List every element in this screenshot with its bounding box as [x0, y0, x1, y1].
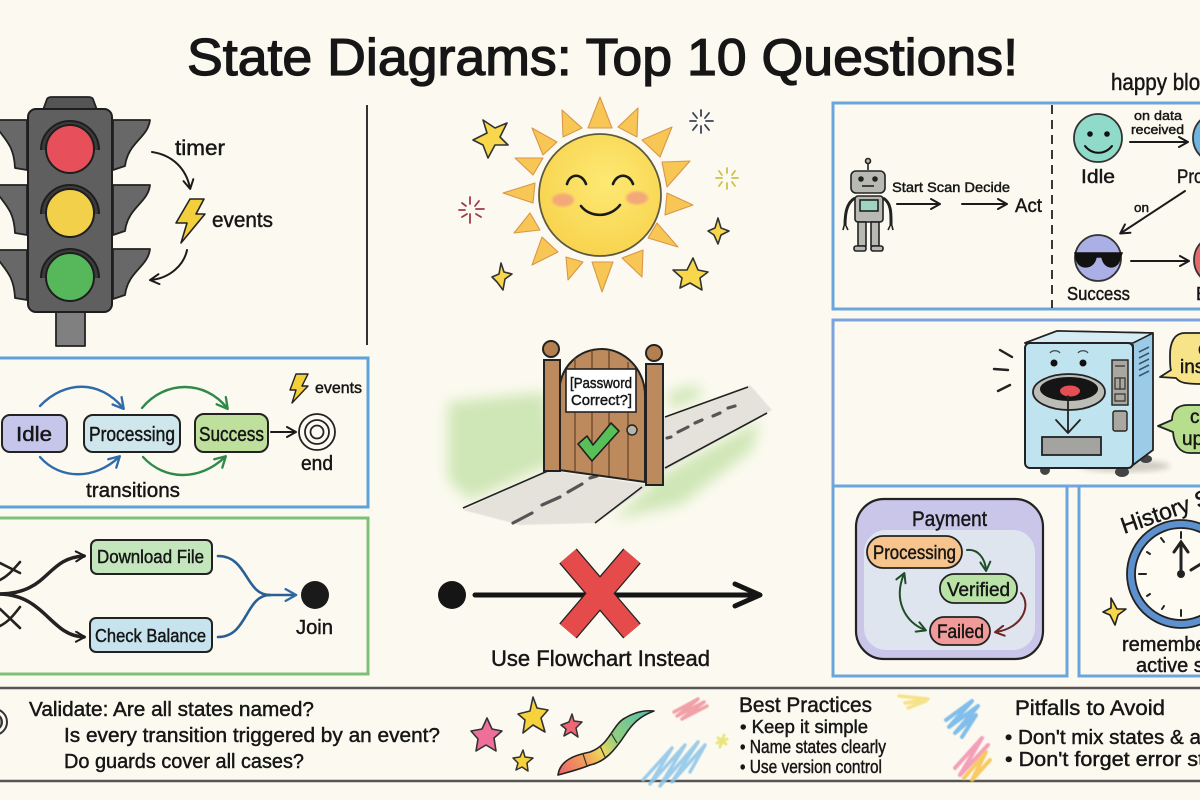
join arrows — [218, 556, 295, 637]
robot steps text: Start Scan Decide — [892, 179, 1010, 195]
grass — [448, 385, 760, 520]
panel: history state — [1079, 471, 1200, 677]
best practices: • Keep it simple — [740, 717, 868, 737]
guard sign — [566, 369, 636, 412]
panel border — [833, 320, 1200, 486]
label: events: events — [315, 380, 362, 397]
caption — [1122, 634, 1200, 677]
state: Download File — [91, 540, 212, 574]
label: transitions: transitions — [86, 480, 180, 502]
fork arrows — [0, 556, 84, 637]
pitfalls to avoid — [1005, 697, 1200, 771]
label: end: end — [301, 453, 333, 475]
arrow: to end — [271, 431, 295, 433]
road — [463, 385, 772, 525]
icon: join node — [301, 581, 329, 609]
state: Verified: Verified — [947, 580, 1010, 601]
icon: lightning bolt — [176, 199, 205, 243]
state: Success: Success — [199, 424, 264, 446]
sun rays — [503, 97, 693, 292]
panel border — [1079, 486, 1200, 676]
icon: small bolt — [290, 374, 308, 403]
illustration: crossed out flowchart arrow — [438, 556, 760, 671]
best practices — [739, 694, 886, 777]
door knob — [627, 425, 637, 435]
illustration: smiling sun — [459, 97, 738, 292]
guard sign: [Password — [570, 375, 632, 392]
guard sign: Correct?] — [571, 392, 632, 409]
arrow: success to error — [1131, 260, 1188, 262]
arrow: events to green — [151, 250, 187, 280]
validate checklist: Do guards cover all cases? — [64, 751, 304, 773]
sun disc — [539, 134, 661, 256]
arrow: step 2 — [962, 203, 1006, 205]
icon: sparkle star — [1103, 598, 1126, 625]
label: Idle: Idle — [1081, 167, 1115, 188]
sun face — [552, 176, 648, 215]
dashed divider — [1051, 105, 1053, 308]
composite state box — [856, 499, 1043, 659]
best practices: • Name states clearly — [740, 737, 886, 757]
icon: green check — [578, 423, 619, 461]
sparkle: red — [459, 197, 484, 223]
arrow: timer to events — [152, 152, 190, 188]
state: Idle — [2, 415, 67, 452]
state: Processing: Processing — [89, 424, 175, 446]
best practices: • Use version control — [740, 757, 882, 777]
state: Check Balance — [90, 618, 212, 652]
state: Download File: Download File — [97, 547, 204, 567]
label: on data received — [1131, 108, 1184, 137]
panel border — [0, 358, 368, 507]
arrow: failed and processing — [900, 574, 925, 630]
label: Join: Join — [296, 617, 333, 639]
label: events: events — [212, 209, 273, 232]
panel: vending machine — [833, 320, 1200, 486]
icon: error face — [1194, 235, 1200, 285]
panel: robot and smiley states — [833, 103, 1200, 309]
panel: fork and join — [0, 518, 368, 674]
state: Check Balance: Check Balance — [95, 626, 206, 646]
doodle: rainbow ribbon — [558, 711, 654, 775]
panel: traffic light — [0, 97, 273, 346]
state: Processing — [867, 536, 962, 568]
icon: red X — [568, 556, 632, 631]
pitfalls to avoid: Pitfalls to Avoid — [1015, 697, 1165, 720]
best practices: Best Practices — [739, 694, 872, 717]
panel border — [833, 486, 1067, 676]
callout: green — [1158, 405, 1200, 453]
panel border — [833, 103, 1200, 309]
motion lines — [994, 350, 1012, 391]
title: State Diagrams: Top 10 Questions! — [187, 29, 1018, 87]
start dot — [438, 581, 466, 609]
icon: clock — [1127, 520, 1200, 628]
icon: traffic light — [0, 97, 150, 346]
road edges and dashes — [463, 387, 767, 523]
state: Failed — [930, 617, 990, 645]
sparkle: yellow — [716, 168, 738, 189]
label: on data received: on data — [1134, 108, 1183, 123]
caption: Use Flowchart Instead — [491, 646, 710, 671]
decorative stars — [473, 120, 729, 290]
panel border — [0, 518, 368, 674]
panel: payment composite state — [833, 486, 1067, 676]
sparkle: dark — [690, 110, 713, 133]
label: on data received: received — [1131, 122, 1184, 137]
state: Processing — [84, 415, 180, 452]
transition arrows — [40, 387, 227, 475]
callout: yellow — [1160, 333, 1200, 384]
icon: vending machine — [1025, 331, 1153, 477]
panel: bottom strip — [0, 688, 1200, 786]
icon: end state target — [299, 414, 335, 450]
state: Idle: Idle — [16, 424, 52, 446]
icon: success sunglasses face — [1075, 235, 1122, 281]
panel: states and transitions — [0, 358, 368, 507]
arrow: idle to processing — [1130, 141, 1187, 143]
gate posts — [543, 341, 663, 485]
label: Success: Success — [1067, 284, 1130, 304]
state: Failed: Failed — [937, 622, 984, 643]
icon: robot — [843, 158, 893, 251]
state: Verified — [940, 574, 1017, 603]
shadow — [1080, 460, 1170, 472]
validate checklist — [29, 699, 440, 773]
validate checklist: Validate: Are all states named? — [29, 699, 314, 721]
divider line — [366, 105, 368, 345]
icon: partial end target — [0, 709, 7, 735]
label: on: on — [1134, 200, 1149, 215]
icon: processing face — [1193, 113, 1200, 163]
gate door — [559, 349, 645, 482]
validate checklist: Is every transition triggered by an event? — [64, 725, 440, 747]
arrow — [475, 584, 760, 606]
label: timer: timer — [175, 137, 225, 160]
label: Payment: Payment — [912, 508, 987, 531]
rules — [0, 688, 1200, 781]
label: Act: Act — [1015, 196, 1043, 217]
state: Success — [195, 414, 268, 452]
icon: idle smiley — [1074, 114, 1122, 162]
arrow: step 1 — [897, 203, 939, 205]
arrow: verified to failed — [996, 593, 1025, 632]
doodle: crayon scribbles — [643, 696, 990, 786]
arrow: processing to verified — [967, 550, 986, 570]
state: Processing: Processing — [873, 543, 956, 564]
illustration: guard gate — [448, 341, 772, 525]
arrow: processing to success — [1121, 191, 1185, 233]
doodle: stars — [471, 697, 582, 771]
